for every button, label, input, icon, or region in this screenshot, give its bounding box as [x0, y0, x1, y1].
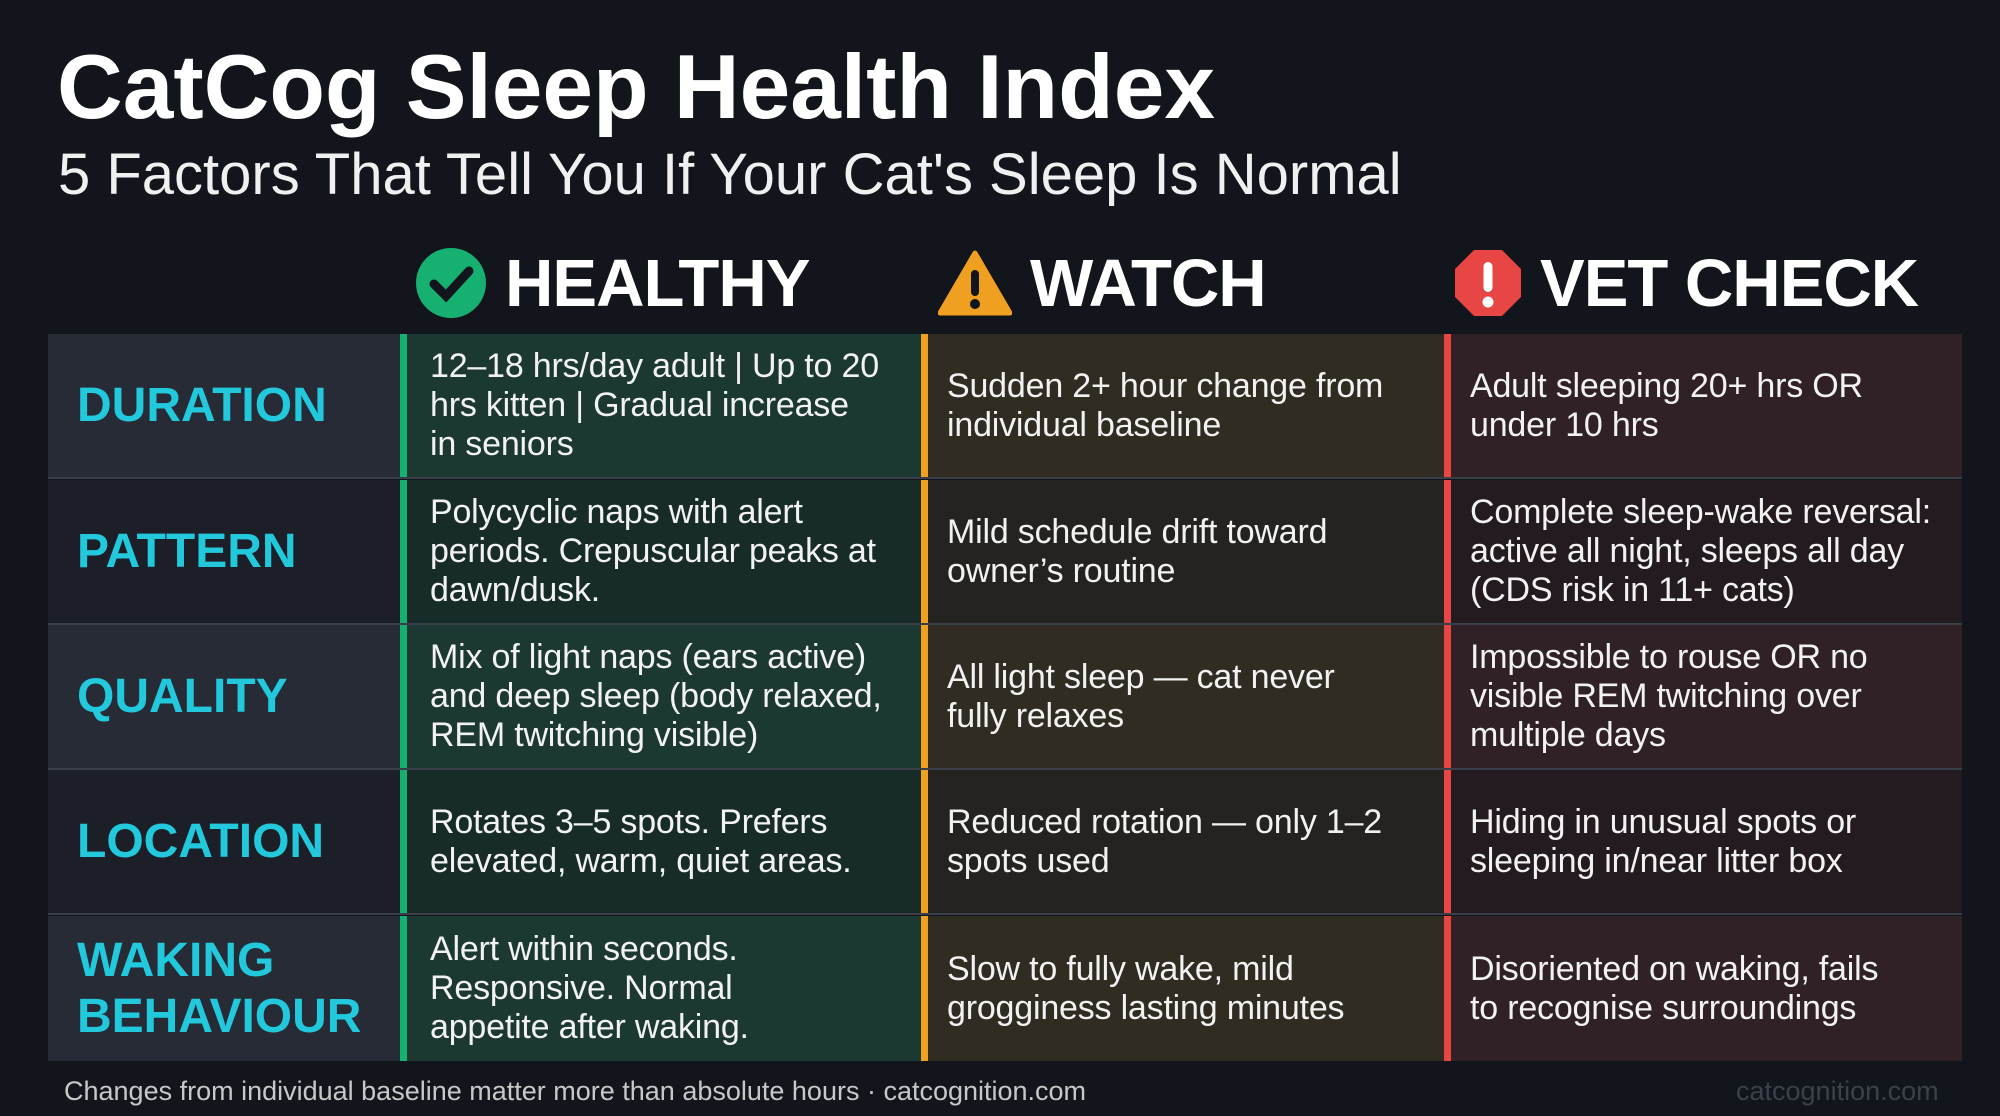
label: duration: DURATION	[77, 378, 327, 432]
row: waking behaviour	[48, 916, 1962, 1061]
watch: quality: All light sleep — cat never	[947, 658, 1335, 696]
label: pattern	[48, 480, 400, 623]
row: quality	[48, 625, 1962, 770]
footer note: Changes from individual baseline matter more than absolute hours · catcognition.com	[64, 1076, 1086, 1106]
vet: pattern	[1444, 480, 1962, 623]
label: waking: BEHAVIOUR	[77, 990, 361, 1042]
healthy: duration: hrs kitten | Gradual increase	[430, 386, 849, 424]
vet: location	[1444, 770, 1962, 913]
watch: quality	[921, 625, 1444, 768]
healthy: duration	[400, 334, 921, 477]
vet: waking: Disoriented on waking, fails	[1470, 950, 1878, 988]
label: location	[48, 770, 400, 913]
vet: location: sleeping in/near litter box	[1470, 842, 1843, 880]
healthy: pattern	[400, 480, 921, 623]
label: waking: WAKING	[77, 934, 274, 986]
header: healthy: HEALTHY	[505, 246, 809, 320]
watch: waking: grogginess lasting minutes	[947, 988, 1344, 1026]
subtitle: 5 Factors That Tell You If Your Cat's Sleep Is Normal	[58, 142, 1402, 207]
vet: duration: Adult sleeping 20+ hrs OR	[1470, 366, 1863, 404]
row: pattern	[48, 480, 1962, 625]
vet: duration: under 10 hrs	[1470, 406, 1659, 444]
header: watch: WATCH	[1030, 246, 1266, 320]
label: quality: QUALITY	[77, 670, 288, 722]
watch: duration: individual baseline	[947, 406, 1221, 444]
vet: pattern: (CDS risk in 11+ cats)	[1470, 571, 1795, 609]
healthy: duration: in seniors	[430, 425, 574, 463]
watch: duration	[921, 334, 1444, 477]
vet: pattern: active all night, sleeps all day	[1470, 532, 1904, 570]
healthy: quality: REM twitching visible)	[430, 716, 758, 754]
watch: pattern	[921, 480, 1444, 623]
vet: location: Hiding in unusual spots or	[1470, 802, 1856, 840]
watch: waking	[921, 916, 1444, 1061]
healthy: waking: appetite after waking.	[430, 1008, 749, 1046]
watch: location: spots used	[947, 842, 1109, 880]
watermark: catcognition.com	[1736, 1076, 1939, 1106]
healthy: waking: Alert within seconds.	[430, 930, 738, 968]
watch: quality: fully relaxes	[947, 696, 1124, 734]
healthy: pattern: dawn/dusk.	[430, 571, 600, 609]
watch: location	[921, 770, 1444, 913]
vet: quality: visible REM twitching over	[1470, 677, 1862, 715]
healthy: waking	[400, 916, 921, 1061]
label: waking	[48, 916, 400, 1061]
healthy: quality	[400, 625, 921, 768]
row: location	[48, 770, 1962, 915]
healthy: duration: 12–18 hrs/day adult | Up to 20	[430, 347, 879, 385]
healthy: waking: Responsive. Normal	[430, 969, 733, 1007]
watch: waking: Slow to fully wake, mild	[947, 950, 1294, 988]
title: CatCog Sleep Health Index	[57, 37, 1215, 138]
healthy: pattern: periods. Crepuscular peaks at	[430, 532, 876, 570]
label: duration	[48, 334, 400, 477]
healthy: location: elevated, warm, quiet areas.	[430, 842, 852, 880]
vet: pattern: Complete sleep-wake reversal:	[1470, 493, 1931, 531]
vet: waking: to recognise surroundings	[1470, 988, 1856, 1026]
watch: location: Reduced rotation — only 1–2	[947, 802, 1382, 840]
vet: quality: Impossible to rouse OR no	[1470, 638, 1868, 676]
watch: pattern: owner’s routine	[947, 552, 1175, 590]
vet: waking	[1444, 916, 1962, 1061]
healthy: location	[400, 770, 921, 913]
label: location: LOCATION	[77, 814, 324, 868]
healthy: pattern: Polycyclic naps with alert	[430, 493, 803, 531]
row: duration	[48, 334, 1962, 479]
watch: pattern: Mild schedule drift toward	[947, 512, 1327, 550]
header: vet check: VET CHECK	[1540, 246, 1918, 320]
watch: duration: Sudden 2+ hour change from	[947, 366, 1383, 404]
healthy: quality: and deep sleep (body relaxed,	[430, 677, 882, 715]
label: quality	[48, 625, 400, 768]
vet: quality	[1444, 625, 1962, 768]
healthy: quality: Mix of light naps (ears active)	[430, 638, 866, 676]
label: pattern: PATTERN	[77, 524, 297, 578]
vet: duration	[1444, 334, 1962, 477]
healthy: location: Rotates 3–5 spots. Prefers	[430, 802, 827, 840]
vet: quality: multiple days	[1470, 716, 1666, 754]
